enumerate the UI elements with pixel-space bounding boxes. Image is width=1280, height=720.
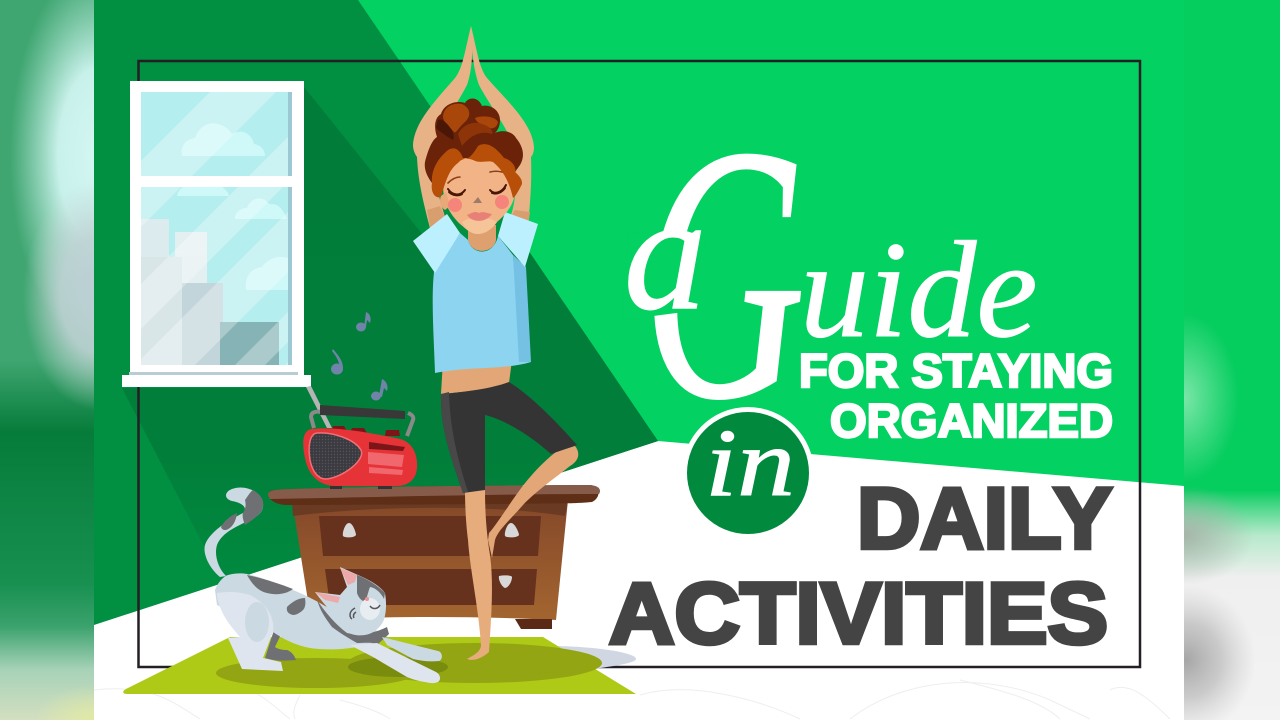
window sill	[122, 372, 311, 387]
drawer knobs	[343, 523, 356, 537]
face	[443, 158, 515, 234]
dresser	[268, 485, 600, 629]
t-shirt	[433, 233, 531, 373]
bun curls	[443, 104, 469, 132]
hair back	[425, 98, 523, 183]
dresser top	[268, 485, 599, 505]
heading: activities: ACTIVITIES	[609, 566, 1108, 662]
handle	[311, 412, 413, 436]
script word: uide: uide	[800, 213, 1038, 366]
arms	[413, 26, 472, 232]
radio panels	[369, 442, 405, 451]
title	[609, 70, 1113, 662]
left blurred side strip	[0, 0, 94, 720]
standing leg	[465, 489, 492, 660]
yoga mat	[123, 637, 636, 694]
clouds	[177, 123, 288, 290]
cat spots	[247, 575, 293, 594]
hind leg back	[265, 627, 296, 661]
decorative frame	[138, 61, 1140, 667]
glass glare stripes	[141, 92, 288, 365]
cat haunch	[217, 592, 283, 671]
speaker	[309, 433, 362, 479]
script letter: G: G	[642, 70, 805, 475]
subtitle: for staying: FOR STAYING	[799, 344, 1113, 397]
script word: a: a	[624, 161, 706, 344]
badge: in	[682, 407, 814, 539]
woman doing yoga	[413, 26, 578, 660]
lips	[467, 212, 492, 221]
floor contour lines	[94, 680, 1170, 719]
mat shadow	[550, 646, 636, 672]
nose	[473, 197, 482, 203]
window frame	[130, 81, 304, 375]
antenna	[306, 386, 332, 428]
background: dark green wall panel	[94, 0, 658, 625]
background: bright green wall	[94, 0, 1184, 486]
cat	[205, 487, 442, 683]
gap in G stem	[622, 232, 706, 320]
window glass	[141, 92, 292, 365]
subtitle: organized: ORGANIZED	[830, 394, 1113, 447]
bent leg	[488, 446, 578, 558]
radio body	[303, 428, 417, 486]
heading: daily: DAILY	[857, 471, 1112, 567]
city buildings	[141, 219, 279, 365]
eyes and brows	[448, 171, 506, 195]
collar	[317, 600, 389, 644]
drawers	[319, 516, 541, 556]
tail	[205, 487, 263, 577]
front legs	[382, 637, 442, 661]
shorts	[441, 382, 577, 493]
radio	[303, 386, 417, 489]
midriff	[441, 360, 512, 394]
cat body	[215, 573, 388, 649]
neck	[468, 225, 496, 251]
background: white floor	[94, 441, 1184, 720]
sleeves	[413, 214, 460, 273]
music notes	[331, 312, 388, 400]
cheeks	[448, 198, 462, 212]
badge: in: in	[705, 409, 795, 516]
window shadow on wall	[122, 87, 658, 583]
window	[130, 81, 304, 375]
right blurred side strip	[1184, 0, 1280, 720]
cat head	[315, 567, 386, 635]
hair fringe	[432, 144, 522, 198]
